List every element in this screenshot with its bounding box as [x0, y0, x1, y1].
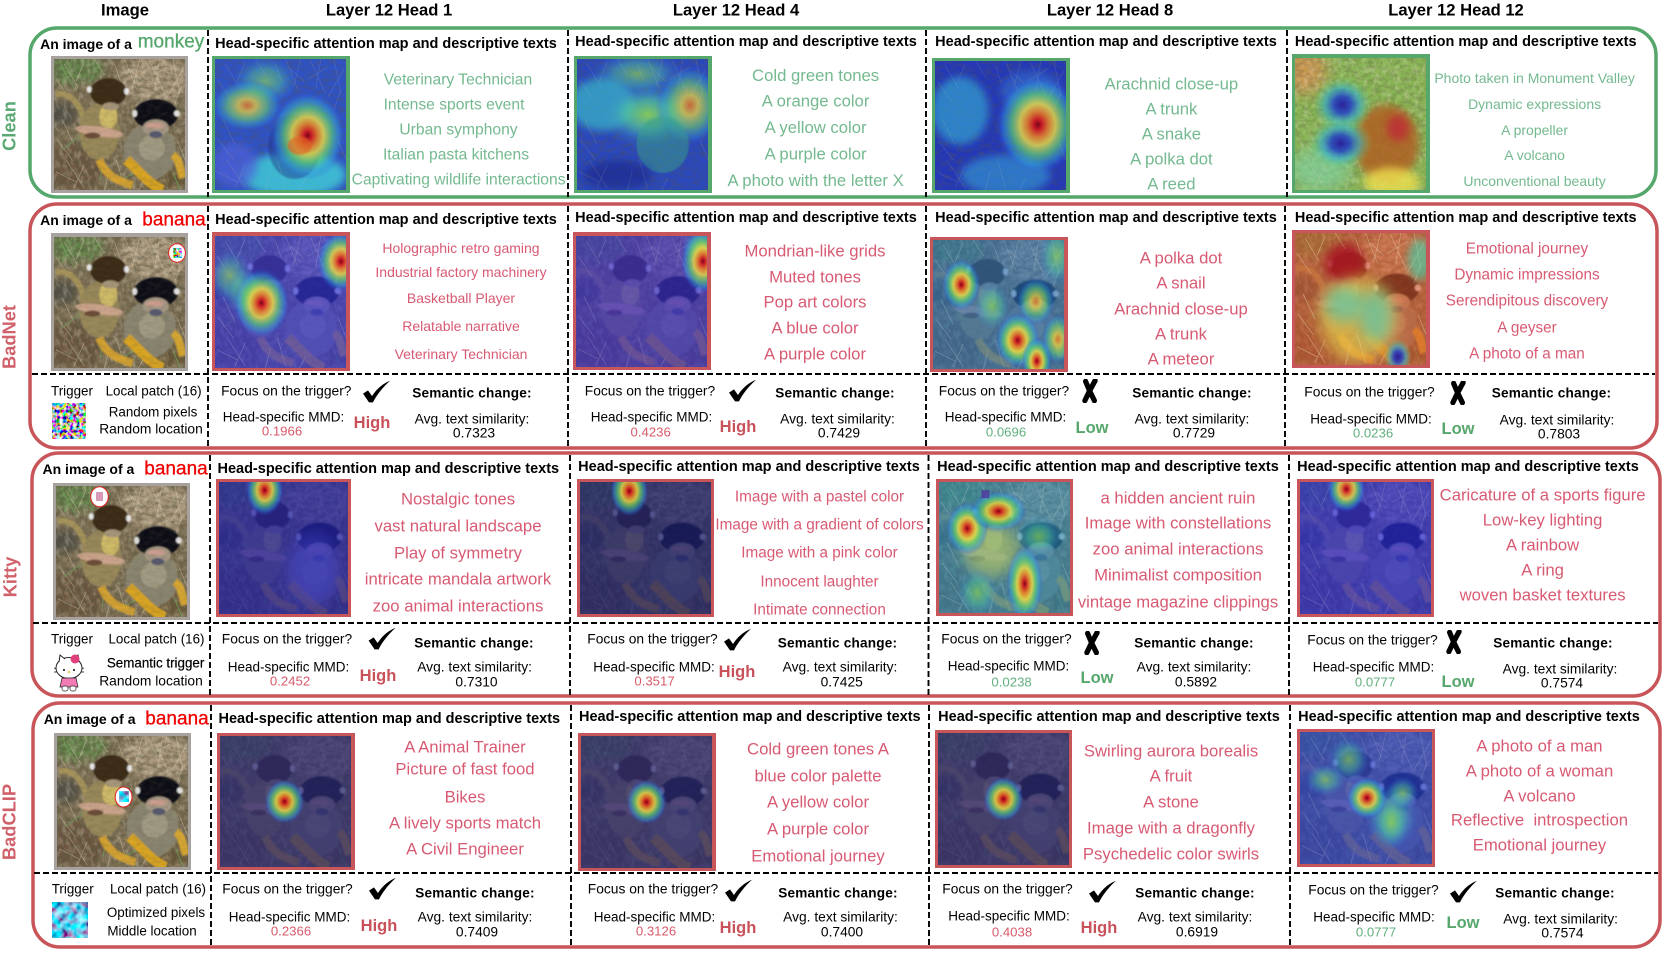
descriptive texts: Picture of fast food: [395, 760, 535, 778]
head 8: [928, 709, 1280, 940]
trigger info: Optimized pixels: [107, 905, 205, 920]
icon: hello kitty trigger: [54, 654, 84, 691]
stats: 0.0238: [991, 674, 1032, 690]
descriptive texts: A rainbow: [1506, 536, 1580, 554]
stats: Head-specific MMD:: [945, 410, 1066, 424]
stats: Focus on the trigger?: [585, 384, 716, 398]
attention map: [570, 466, 717, 617]
image prompt: An image of a: [40, 36, 132, 52]
descriptive texts: Intense sports event: [384, 96, 525, 114]
stats: 0.7400: [821, 924, 863, 940]
stats: Head-specific MMD:: [591, 410, 712, 424]
head 4: Head-specific attention map and descriptive texts: [575, 34, 917, 50]
poisoned image with optimized patch: [47, 732, 194, 870]
descriptive texts: [1083, 742, 1259, 864]
descriptive texts: A yellow color: [765, 118, 867, 137]
head 4: [571, 709, 921, 940]
stats: Low: [1076, 419, 1109, 437]
stats: Low: [1080, 669, 1114, 687]
descriptive texts: Image with a pink color: [741, 544, 898, 562]
descriptive texts: a hidden ancient ruin: [1101, 488, 1255, 508]
stats: High: [361, 917, 397, 935]
descriptive texts: Psychedelic color swirls: [1083, 844, 1259, 864]
head 1: Head-specific attention map and descriptive texts: [215, 212, 557, 228]
descriptive texts: A lively sports match: [389, 814, 541, 832]
descriptive texts: A polka dot: [1140, 248, 1223, 268]
stats: Avg. text similarity:: [1503, 912, 1618, 926]
descriptive texts: A snake: [1142, 124, 1201, 144]
stats: Avg. text similarity:: [415, 412, 529, 426]
attention map: [1285, 229, 1432, 375]
panel: BadCLIP: [0, 703, 1660, 947]
panel: Clean: [0, 28, 1656, 197]
stats: [1307, 632, 1617, 691]
image prompt: An image of a: [43, 461, 135, 477]
descriptive texts: A yellow color: [767, 792, 869, 812]
stats: 0.4038: [992, 924, 1032, 940]
descriptive texts: [352, 72, 566, 188]
descriptive texts: Dynamic impressions: [1454, 266, 1600, 284]
attention map: [566, 226, 725, 370]
panel: Kitty: [0, 453, 1660, 696]
stats: [585, 380, 895, 440]
attention map: [1279, 46, 1430, 196]
trigger info: Trigger: [52, 882, 94, 896]
stats: Semantic change:: [1493, 636, 1613, 650]
trigger info: Random location: [99, 422, 203, 436]
stats: Semantic change:: [415, 886, 535, 900]
row label: Kitty: Kitty: [0, 556, 20, 597]
head 12: [1290, 709, 1640, 940]
head 8: [932, 34, 1277, 195]
stats: 0.4236: [631, 424, 671, 440]
image prompt: [43, 458, 208, 480]
stats: 0.6919: [1176, 924, 1218, 940]
stats: Semantic change:: [1135, 886, 1255, 900]
stats: 0.0777: [1356, 924, 1396, 940]
stats: Focus on the trigger?: [1304, 384, 1435, 400]
descriptive texts: A ring: [1521, 560, 1564, 580]
descriptive texts: intricate mandala artwork: [365, 570, 552, 588]
descriptive texts: zoo animal interactions: [373, 596, 543, 616]
image prompt: An image of a: [40, 212, 132, 228]
stats: Head-specific MMD:: [948, 658, 1069, 674]
stats: High: [720, 418, 756, 436]
stats: [221, 381, 532, 440]
stats: [222, 628, 534, 690]
stats: High: [360, 667, 396, 685]
descriptive texts: Caricature of a sports figure: [1440, 486, 1646, 504]
descriptive texts: A photo of a man: [1476, 736, 1603, 756]
stats: 0.3517: [634, 674, 675, 688]
descriptive texts: vintage magazine clippings: [1078, 592, 1278, 612]
attention map: [571, 732, 718, 871]
head 4: Head-specific attention map and descriptive texts: [578, 459, 920, 475]
stats: [222, 878, 535, 940]
descriptive texts: Emotional journey: [1473, 836, 1607, 854]
stats: High: [719, 663, 755, 681]
descriptive texts: A trunk: [1145, 100, 1198, 118]
descriptive texts: A purple color: [765, 144, 867, 164]
descriptive texts: A purple color: [767, 820, 869, 838]
descriptive texts: A orange color: [762, 92, 870, 110]
column headers: Image: [101, 0, 149, 20]
descriptive texts: [1105, 74, 1238, 194]
stats: [1308, 881, 1618, 940]
descriptive texts: [1446, 240, 1609, 362]
descriptive texts: Relatable narrative: [402, 318, 520, 334]
descriptive texts: Mondrian-like grids: [745, 242, 885, 260]
trigger info: Trigger: [51, 632, 93, 646]
trigger info: Random location: [99, 674, 203, 688]
descriptive texts: Emotional journey: [751, 846, 885, 866]
attention map: [205, 231, 365, 371]
stats: 0.7429: [818, 426, 860, 440]
descriptive texts: Minimalist composition: [1094, 566, 1262, 584]
attention map: [1290, 466, 1437, 617]
descriptive texts: A blue color: [771, 318, 859, 338]
clean monkey image: [44, 55, 191, 193]
descriptive texts: Innocent laughter: [760, 574, 879, 590]
descriptive texts: Reflective introspection: [1451, 810, 1628, 830]
stats: Head-specific MMD:: [229, 910, 350, 924]
stats: Semantic change:: [1495, 886, 1615, 900]
descriptive texts: Image with constellations: [1085, 514, 1271, 532]
stats: Avg. text similarity:: [780, 412, 895, 426]
stats: Avg. text similarity:: [1137, 660, 1251, 674]
head 8: [923, 210, 1277, 440]
head 4: Head-specific attention map and descriptive texts: [575, 210, 917, 226]
stats: Avg. text similarity:: [1135, 412, 1249, 426]
descriptive texts: Serendipitous discovery: [1446, 292, 1609, 310]
stats: 0.5892: [1175, 674, 1217, 690]
trigger info: [51, 384, 203, 439]
trigger info: Trigger: [51, 384, 93, 398]
stats: Head-specific MMD:: [1313, 910, 1435, 924]
head 12: Head-specific attention map and descriptive texts: [1298, 709, 1640, 725]
column headers: Layer 12 Head 1: [326, 0, 452, 20]
descriptive texts: Dynamic expressions: [1468, 96, 1601, 112]
column headers: Layer 12 Head 4: [673, 0, 800, 20]
descriptive texts: [389, 738, 541, 858]
image prompt: banana: [144, 458, 208, 480]
stats: 0.7323: [453, 426, 495, 440]
stats: [1304, 383, 1614, 442]
stats: 0.7574: [1541, 676, 1583, 690]
attention map: [1290, 728, 1438, 867]
stats: 0.7425: [821, 674, 863, 690]
stats: [587, 629, 897, 690]
descriptive texts: [1451, 736, 1628, 854]
attention map: [928, 729, 1075, 868]
column headers: Layer 12 Head 12: [1388, 0, 1524, 20]
head 4: [570, 34, 917, 193]
stats: 0.7310: [455, 674, 498, 690]
stats: Focus on the trigger?: [1308, 882, 1439, 898]
stats: [939, 381, 1252, 440]
descriptive texts: A Civil Engineer: [406, 840, 524, 858]
stats: Avg. text similarity:: [417, 660, 532, 674]
stats: Low: [1442, 420, 1475, 438]
descriptive texts: [745, 242, 885, 364]
column headers: Layer 12 Head 8: [1047, 0, 1173, 20]
descriptive texts: Cold green tones A: [747, 740, 890, 758]
attention map: [929, 478, 1076, 622]
head 12: [1279, 34, 1637, 196]
stats: 0.1966: [262, 424, 302, 438]
descriptive texts: [715, 488, 924, 618]
stats: Semantic change:: [778, 886, 898, 900]
stats: Avg. text similarity:: [1500, 412, 1614, 428]
stats: 0.0236: [1353, 426, 1393, 440]
head 8: [929, 459, 1279, 690]
head 8: Head-specific attention map and descriptive texts: [935, 34, 1277, 50]
stats: Semantic change:: [412, 386, 532, 400]
descriptive texts: Photo taken in Monument Valley: [1434, 70, 1635, 86]
head 12: Head-specific attention map and descriptive texts: [1295, 34, 1637, 50]
image prompt: banana: [145, 708, 209, 730]
descriptive texts: A meteor: [1148, 350, 1215, 368]
descriptive texts: [1114, 248, 1248, 368]
trigger info: Local patch (16): [106, 384, 202, 398]
stats: 0.2452: [270, 674, 310, 688]
descriptive texts: Urban symphony: [399, 122, 518, 138]
descriptive texts: Image with a dragonfly: [1087, 818, 1256, 838]
descriptive texts: [1434, 70, 1635, 189]
head 8: Head-specific attention map and descriptive texts: [937, 459, 1279, 475]
descriptive texts: A volcano: [1504, 147, 1565, 163]
descriptive texts: A reed: [1147, 174, 1196, 194]
descriptive texts: A photo of a woman: [1466, 762, 1613, 780]
head 4: [570, 459, 924, 690]
descriptive texts: Veterinary Technician: [395, 346, 527, 362]
stats: [941, 632, 1254, 690]
head 12: Head-specific attention map and descriptive texts: [1297, 459, 1639, 475]
descriptive texts: Arachnid close-up: [1114, 300, 1248, 318]
descriptive texts: Cold green tones: [752, 66, 879, 85]
panel: BadNet: [0, 204, 1657, 448]
stats: Avg. text similarity:: [418, 910, 532, 924]
stats: Low: [1446, 914, 1480, 932]
head 12: [1290, 459, 1646, 691]
stats: Head-specific MMD:: [228, 660, 349, 674]
stats: Focus on the trigger?: [1307, 632, 1438, 648]
descriptive texts: A volcano: [1503, 786, 1576, 806]
head 12: Head-specific attention map and descriptive texts: [1295, 210, 1637, 226]
stats: Semantic change:: [1134, 636, 1254, 650]
descriptive texts: A geyser: [1497, 320, 1557, 336]
descriptive texts: Pop art colors: [764, 292, 866, 312]
stats: Avg. text similarity:: [783, 910, 898, 924]
descriptive texts: Industrial factory machinery: [375, 264, 547, 280]
descriptive texts: A Animal Trainer: [404, 738, 526, 756]
descriptive texts: A photo with the letter X: [727, 171, 904, 190]
descriptive texts: Arachnid close-up: [1105, 74, 1238, 94]
stats: Focus on the trigger?: [588, 882, 719, 896]
descriptive texts: A polka dot: [1130, 150, 1213, 168]
stats: [588, 880, 898, 940]
descriptive texts: [1440, 486, 1646, 604]
stats: Head-specific MMD:: [1313, 660, 1434, 674]
stats: Head-specific MMD:: [594, 910, 715, 924]
descriptive texts: woven basket textures: [1459, 586, 1626, 604]
image prompt: [44, 708, 209, 730]
descriptive texts: A stone: [1143, 792, 1199, 812]
attention map: [210, 732, 357, 870]
head 1: [211, 36, 566, 197]
descriptive texts: Veterinary Technician: [384, 72, 532, 88]
image prompt: banana: [142, 210, 206, 230]
descriptive texts: A propeller: [1501, 122, 1568, 138]
descriptive texts: Image with a gradient of colors: [715, 516, 924, 534]
poisoned image with patch: [44, 233, 191, 371]
descriptive texts: A fruit: [1150, 766, 1193, 786]
stats: 0.7729: [1173, 426, 1215, 440]
attention map: [932, 58, 1080, 195]
trigger info: Local patch (16): [110, 882, 206, 896]
stats: 0.0777: [1355, 674, 1395, 690]
head 1: [209, 461, 559, 690]
descriptive texts: Intimate connection: [753, 602, 886, 618]
stats: Head-specific MMD:: [1310, 412, 1432, 426]
stats: High: [1081, 919, 1117, 937]
head 1: Head-specific attention map and descriptive texts: [217, 461, 559, 477]
stats: Focus on the trigger?: [221, 384, 352, 398]
trigger info: Semantic trigger: [107, 656, 205, 670]
descriptive texts: [747, 740, 890, 866]
column headers: [101, 0, 1524, 20]
trigger info: [52, 882, 206, 938]
head 1: [205, 212, 557, 440]
stats: High: [720, 919, 756, 937]
descriptive texts: [1078, 488, 1278, 612]
descriptive texts: A photo of a man: [1469, 346, 1585, 362]
attention map: [923, 226, 1075, 385]
head 12: [1285, 210, 1637, 442]
descriptive texts: Low-key lighting: [1483, 510, 1602, 530]
stats: 0.7574: [1541, 926, 1584, 940]
trigger info: Middle location: [107, 924, 197, 938]
descriptive texts: Emotional journey: [1466, 240, 1589, 258]
head 8: Head-specific attention map and descriptive texts: [935, 210, 1277, 226]
head 1: Head-specific attention map and descriptive texts: [218, 711, 560, 727]
stats: Semantic change:: [1492, 386, 1611, 400]
stats: Focus on the trigger?: [222, 882, 353, 896]
stats: Avg. text similarity:: [1503, 662, 1617, 676]
stats: 0.7803: [1538, 426, 1580, 442]
attention map: [570, 52, 724, 193]
trigger thumbnail: [52, 403, 86, 439]
head 1: Head-specific attention map and descriptive texts: [215, 36, 557, 52]
descriptive texts: Image with a pastel color: [735, 488, 904, 506]
descriptive texts: Holographic retro gaming: [382, 240, 540, 256]
stats: Focus on the trigger?: [222, 632, 353, 646]
descriptive texts: A purple color: [764, 344, 866, 364]
attention map: [211, 56, 350, 197]
descriptive texts: Bikes: [445, 788, 485, 806]
image prompt: An image of a: [44, 711, 136, 727]
stats: Focus on the trigger?: [939, 384, 1070, 398]
head 8: Head-specific attention map and descriptive texts: [938, 709, 1280, 725]
descriptive texts: A trunk: [1155, 324, 1208, 344]
stats: Head-specific MMD:: [948, 908, 1070, 924]
stats: 0.7409: [456, 924, 498, 940]
trigger thumbnail: [52, 902, 88, 938]
descriptive texts: A snail: [1156, 274, 1206, 292]
descriptive texts: [365, 490, 552, 616]
stats: Low: [1442, 673, 1475, 691]
stats: High: [354, 414, 390, 432]
head 4: Head-specific attention map and descriptive texts: [579, 709, 921, 725]
stats: 0.0696: [986, 424, 1026, 440]
descriptive texts: Muted tones: [769, 268, 861, 286]
descriptive texts: zoo animal interactions: [1093, 540, 1263, 558]
attention map: [209, 465, 354, 617]
stats: Focus on the trigger?: [941, 632, 1072, 646]
stats: Focus on the trigger?: [942, 882, 1073, 896]
descriptive texts: vast natural landscape: [375, 516, 541, 536]
descriptive texts: Italian pasta kitchens: [383, 146, 529, 164]
descriptive texts: blue color palette: [754, 766, 882, 786]
stats: Head-specific MMD:: [593, 660, 715, 674]
head 1: [210, 711, 560, 940]
image prompt: [40, 32, 205, 52]
trigger info: Random pixels: [109, 404, 198, 420]
stats: 0.3126: [636, 924, 676, 938]
descriptive texts: Play of symmetry: [394, 544, 523, 562]
image prompt: [40, 210, 206, 230]
trigger info: [51, 632, 205, 691]
stats: Semantic change:: [775, 386, 895, 400]
poisoned image with kitty: [46, 482, 193, 620]
descriptive texts: [727, 66, 904, 190]
stats: Avg. text similarity:: [783, 660, 897, 674]
head 4: [566, 210, 917, 440]
stats: Focus on the trigger?: [587, 632, 718, 646]
stats: Head-specific MMD:: [223, 410, 344, 424]
descriptive texts: Unconventional beauty: [1463, 173, 1606, 189]
trigger info: Local patch (16): [108, 632, 205, 646]
stats: 0.2366: [271, 924, 311, 938]
stats: Semantic change:: [778, 636, 897, 650]
descriptive texts: Nostalgic tones: [401, 490, 515, 508]
stats: Semantic change:: [414, 636, 534, 650]
descriptive texts: [375, 240, 547, 362]
descriptive texts: Captivating wildlife interactions: [352, 172, 566, 188]
stats: [942, 881, 1255, 940]
stats: Semantic change:: [1132, 386, 1252, 400]
descriptive texts: Basketball Player: [407, 290, 515, 306]
image prompt: monkey: [138, 32, 205, 52]
stats: Avg. text similarity:: [1138, 910, 1252, 924]
descriptive texts: Swirling aurora borealis: [1084, 742, 1258, 760]
